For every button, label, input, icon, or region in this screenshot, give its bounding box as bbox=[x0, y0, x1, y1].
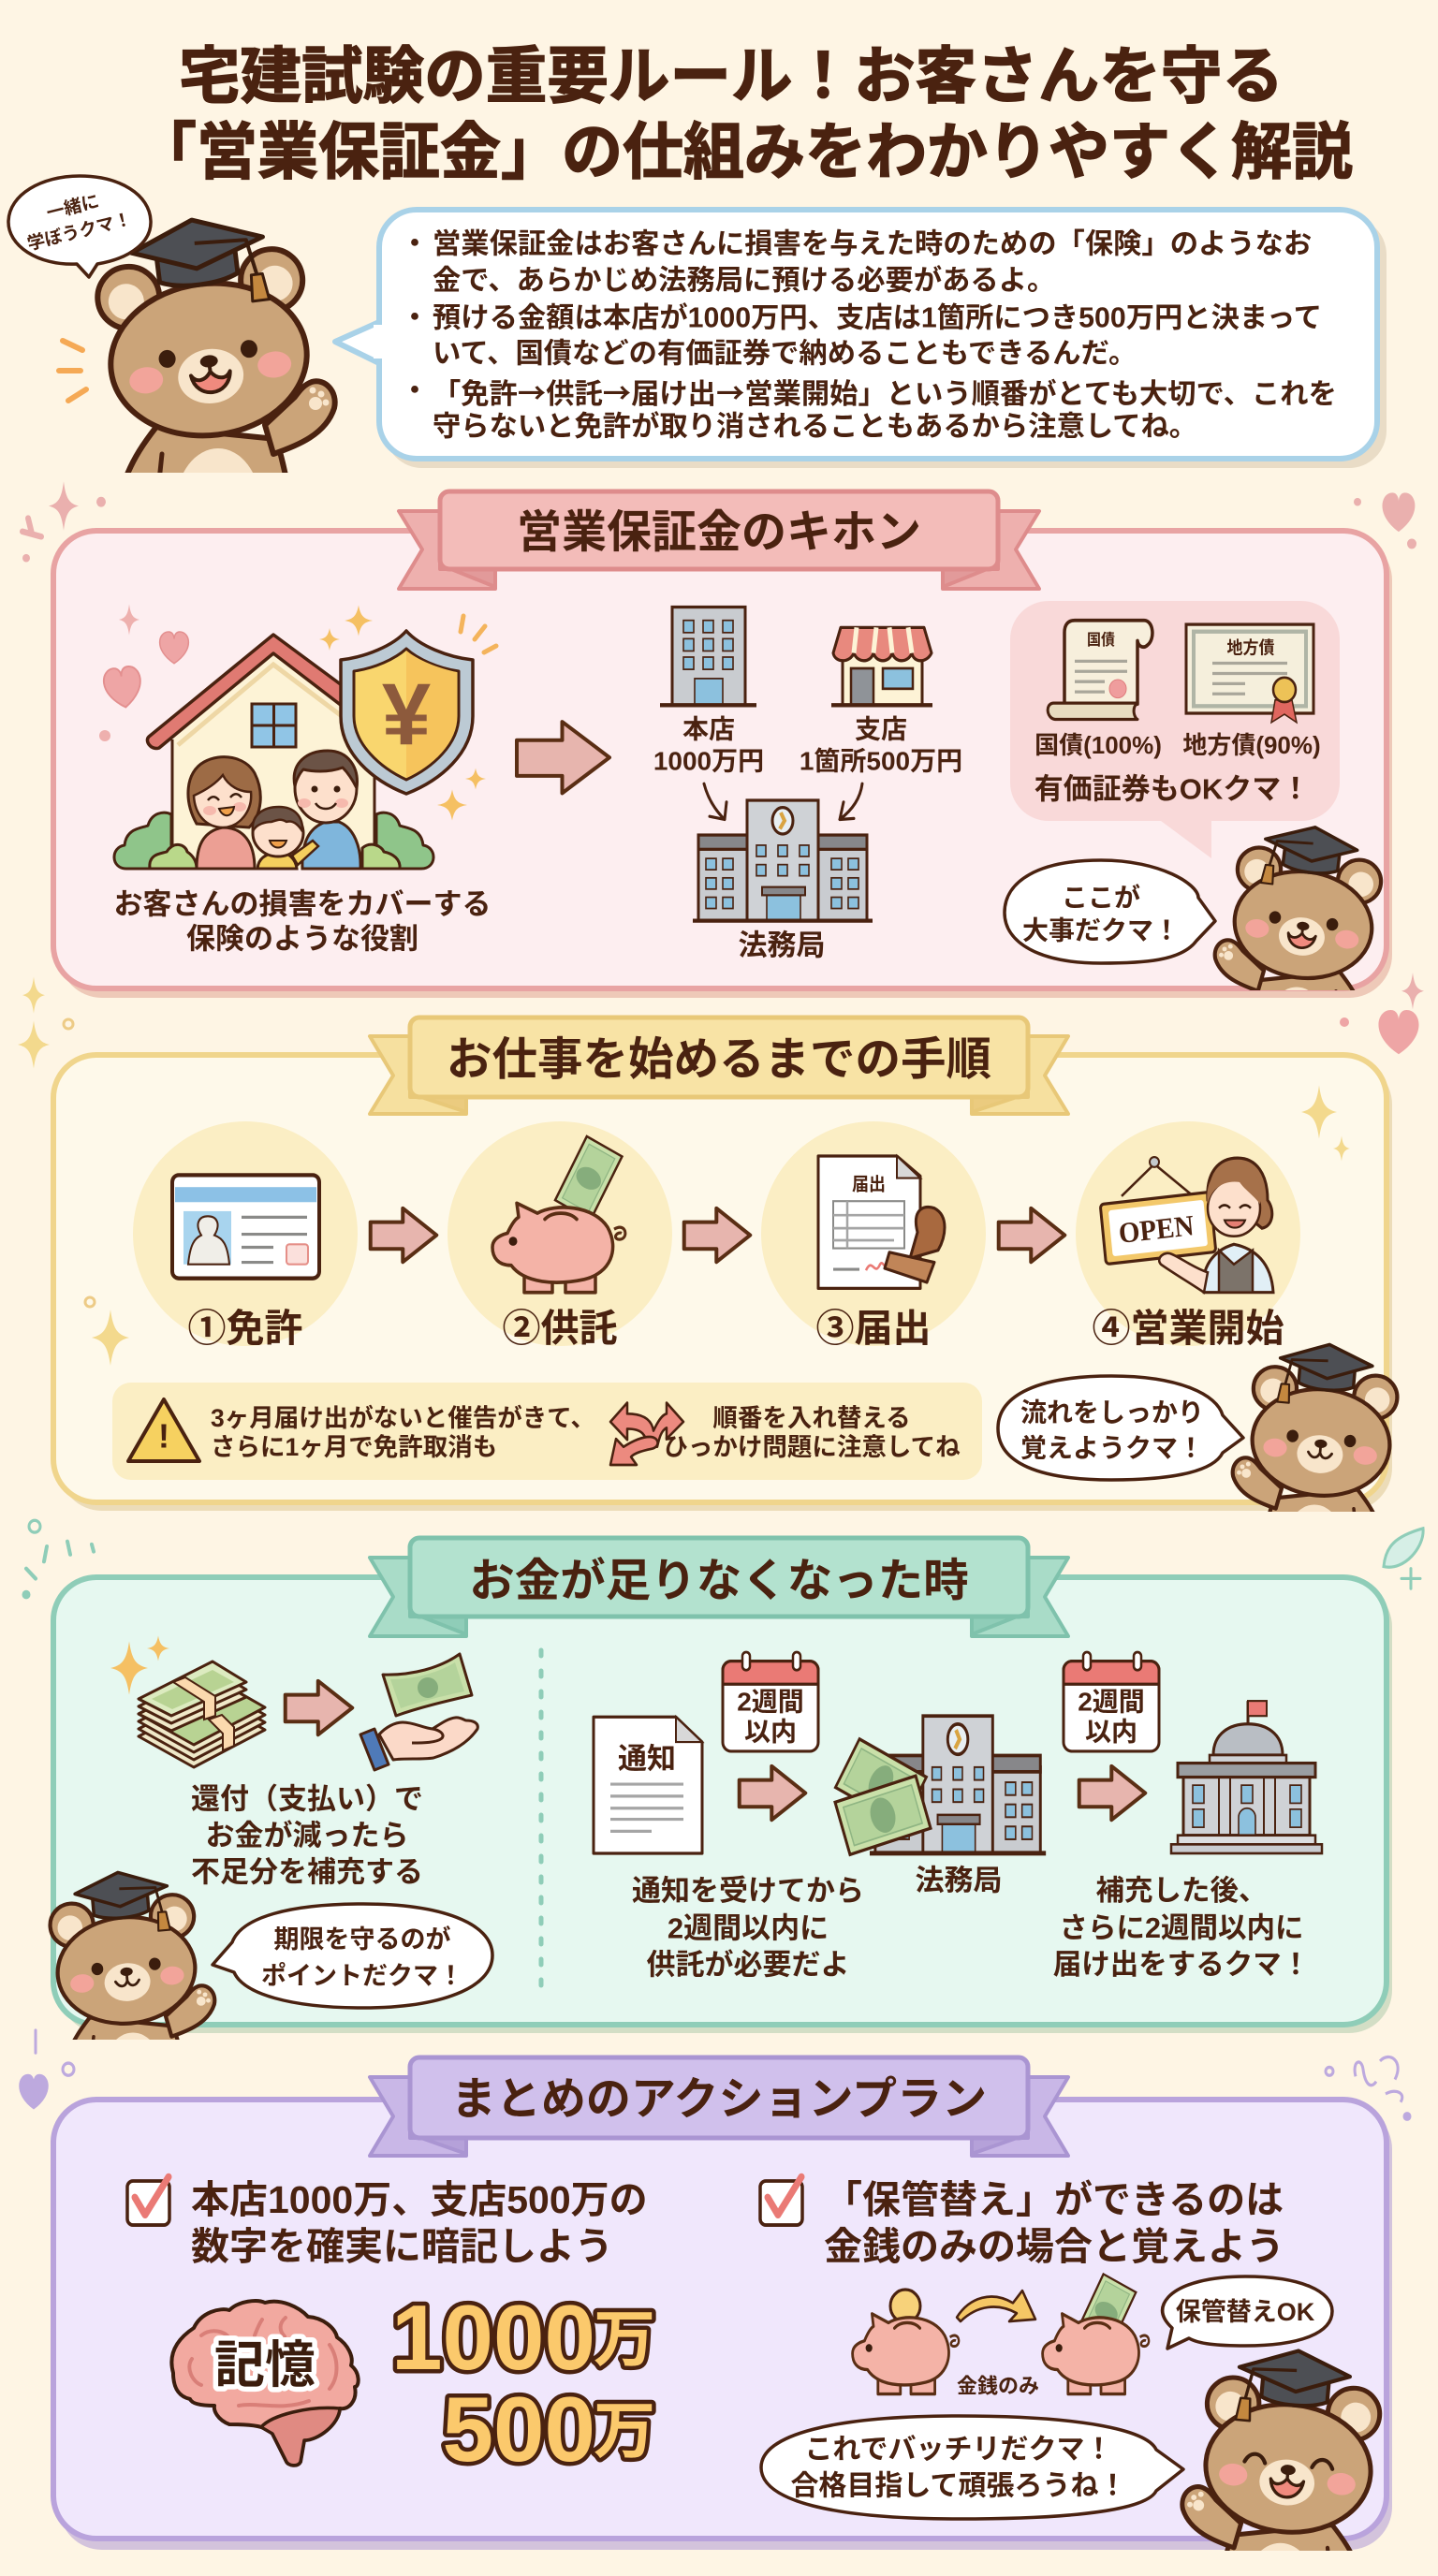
speech bubble: 合格目指して: これでバッチリだクマ！ bbox=[804, 2434, 1113, 2466]
step 4: open sign and clerk icon: OPEN bbox=[1117, 1208, 1196, 1250]
big amounts: 万 bbox=[594, 2305, 655, 2374]
icon: brain with 記憶: 記憶 bbox=[214, 2337, 315, 2393]
big amounts bbox=[391, 2286, 655, 2481]
ribbon heading bbox=[370, 2057, 1068, 2156]
speech bubble: 期限を守る: ポイントだクマ！ bbox=[261, 1962, 463, 1990]
warning bar bbox=[112, 1383, 982, 1480]
speech bubble: 流れをしっかり: 流れをしっかり bbox=[1020, 1398, 1204, 1427]
bullet list: 「免許→供託→届け出→営業開始」という順番がとても大切で、これを bbox=[433, 371, 1337, 412]
ribbon heading bbox=[370, 1017, 1068, 1114]
icon: father bbox=[294, 751, 360, 869]
step 2: piggy bank icon bbox=[492, 1136, 625, 1293]
caption: 補充: 補充した後、 bbox=[1095, 1875, 1268, 1907]
icon: bureau with money bbox=[835, 1716, 1046, 1854]
callout: securities OK: 有価証券もOKクマ！ bbox=[1034, 773, 1310, 805]
arrow bbox=[286, 1681, 352, 1734]
speech bubble: 流れをしっかり: 覚えようクマ！ bbox=[1020, 1434, 1204, 1462]
icon: calendar two weeks: 2週間 bbox=[1078, 1687, 1145, 1717]
arrow bbox=[740, 1766, 805, 1820]
labels: 本店 / 支店 amounts: 本店 bbox=[682, 715, 735, 743]
icon: brain with 記憶 bbox=[171, 2301, 359, 2466]
callout: securities OK: 国債(100%) bbox=[1034, 731, 1162, 759]
mascot bear bbox=[1180, 2349, 1382, 2551]
speech bubble: 合格目指して bbox=[761, 2416, 1183, 2519]
bullet list: 金で、あらかじめ法務局に預ける必要があるよ。 bbox=[433, 264, 1055, 296]
warning bar: ひっかけ問題に注意してね bbox=[663, 1433, 961, 1461]
illustration: savings transfer: 金銭のみ bbox=[957, 2374, 1039, 2398]
labels: 本店 / 支店 amounts bbox=[653, 715, 962, 775]
caption: 還付: お金が減ったら bbox=[206, 1820, 408, 1852]
panel: 営業保証金のキホン bbox=[51, 489, 1392, 998]
panel: お金が足りなくなった時 bbox=[48, 1535, 1392, 2040]
speech bubble: 一緒に学ぼうクマ bbox=[8, 176, 151, 277]
speech bubble: 流れをしっかり bbox=[998, 1376, 1243, 1480]
icon: yen shield: ¥ bbox=[382, 665, 431, 764]
icon: warning triangle bbox=[128, 1399, 199, 1461]
mascot bear bbox=[1230, 1342, 1400, 1512]
action item 1 bbox=[127, 2177, 648, 2268]
speech bubble: 期限を守る bbox=[213, 1904, 492, 2008]
step circles bbox=[133, 1121, 1300, 1346]
icon: notice document: 通知 bbox=[618, 1743, 676, 1775]
decorations: around panel 1 bbox=[22, 481, 1424, 1014]
arrow bbox=[517, 722, 609, 793]
caption: 還付: 還付（支払い）で bbox=[191, 1782, 423, 1816]
icon: child bbox=[253, 807, 318, 869]
caption: 補充: 届け出をするクマ！ bbox=[1053, 1949, 1310, 1981]
ribbon heading bbox=[399, 491, 1039, 589]
caption: 損害カバー bbox=[114, 887, 491, 955]
intro explanation bubble bbox=[335, 210, 1387, 468]
ribbon heading: お金が足りなくなった時 bbox=[469, 1556, 969, 1606]
icon: bill and receiving hand bbox=[360, 1654, 477, 1770]
step labels: ③届出 bbox=[816, 1307, 931, 1350]
icon: legal affairs bureau bbox=[693, 800, 873, 921]
speech bubble: 一緒に学ぼうクマ: 学ぼうクマ！ bbox=[25, 208, 134, 255]
icon: government bond scroll: 国債 bbox=[1087, 632, 1115, 649]
action item 2: 「保管替え」ができるのは bbox=[824, 2178, 1284, 2221]
icon: check box bbox=[127, 2177, 169, 2225]
label: 法務局: 法務局 bbox=[738, 929, 826, 962]
icon: local bond certificate: 地方債 bbox=[1227, 637, 1275, 658]
bullet list: ・ bbox=[401, 228, 429, 260]
title: 宅建試験の重要ルール！お客さんを守る bbox=[179, 41, 1284, 110]
speech bubble: 保管替えOK: 保管替えOK bbox=[1176, 2298, 1315, 2326]
speech bubble: 保管替えOK bbox=[1163, 2276, 1332, 2349]
icon: mother bbox=[188, 757, 260, 869]
labels: 本店 / 支店 amounts: 1箇所500万円 bbox=[800, 747, 962, 775]
mascot bear bbox=[48, 1870, 217, 2040]
caption: 補充: さらに2週間以内に bbox=[1060, 1912, 1303, 1944]
illustration: house, family and shield bbox=[99, 605, 496, 869]
caption: 損害カバー: 保険のような役割 bbox=[186, 923, 418, 955]
step 1: license card icon bbox=[172, 1175, 319, 1279]
mascot bear: intro bbox=[56, 217, 338, 473]
icon: local bond certificate bbox=[1186, 624, 1313, 723]
action item 2: 金銭のみの場合と覚えよう bbox=[824, 2225, 1284, 2268]
step labels: ②供託 bbox=[502, 1307, 618, 1350]
ribbon heading: まとめのアクションプラン bbox=[451, 2074, 987, 2125]
speech bubble: ここが大事だクマ: ここが bbox=[1062, 882, 1140, 912]
bullet list: ・ bbox=[401, 376, 429, 406]
arrows to 法務局 bbox=[704, 783, 862, 819]
action item 1: 本店1000万、支店500万の bbox=[191, 2178, 648, 2221]
step labels: ④営業開始 bbox=[1092, 1307, 1284, 1350]
speech bubble: ここが大事だクマ: 大事だクマ！ bbox=[1022, 915, 1180, 945]
caption: 還付 bbox=[191, 1782, 423, 1889]
bullet list: 預ける金額は本店が1000万円、支店は1箇所につき500万円と決まって bbox=[433, 301, 1322, 333]
icon: yen shield bbox=[341, 631, 473, 794]
warning bar: 順番を入れ替える bbox=[712, 1404, 911, 1432]
icon: head office building bbox=[660, 607, 756, 705]
step 3: filing document icon bbox=[818, 1156, 945, 1288]
icon: swap arrows bbox=[610, 1403, 683, 1465]
label: 法務局: 法務局 bbox=[916, 1865, 1002, 1896]
speech bubble: ここが大事だクマ bbox=[1005, 860, 1215, 963]
icon: government building bbox=[1171, 1701, 1322, 1853]
warning bar: 3ヶ月届け出がないと催告がきて、 bbox=[211, 1404, 595, 1432]
decorations: around panel 2 bbox=[18, 1010, 1419, 1069]
callout: securities OK: 地方債(90%) bbox=[1182, 731, 1321, 759]
speech bubble: 合格目指して: 合格目指して頑張ろうね！ bbox=[790, 2471, 1127, 2501]
decorations: around panel 3 bbox=[22, 1520, 1423, 1599]
warning bar: さらに1ヶ月で免許取消も bbox=[211, 1433, 497, 1461]
icon: notice document bbox=[594, 1717, 702, 1853]
caption: 通知 bbox=[632, 1874, 864, 1981]
caption: 通知: 2週間以内に bbox=[668, 1911, 829, 1945]
bullet list: ・ bbox=[401, 303, 429, 333]
ribbon heading: お仕事を始めるまでの手順 bbox=[447, 1034, 991, 1085]
step 3: filing document icon: 届出 bbox=[852, 1174, 886, 1194]
icon: calendar two weeks: 以内 bbox=[1085, 1717, 1137, 1747]
action item 1: 数字を確実に暗記しよう bbox=[191, 2225, 613, 2268]
ribbon heading bbox=[370, 1538, 1068, 1636]
labels: 本店 / 支店 amounts: 支店 bbox=[855, 715, 907, 743]
icon: check box bbox=[760, 2177, 802, 2225]
ribbon heading: 営業保証金のキホン bbox=[517, 507, 921, 558]
caption: 還付: 不足分を補充する bbox=[191, 1855, 423, 1889]
step labels bbox=[187, 1307, 1284, 1350]
caption: 補充 bbox=[1053, 1875, 1310, 1981]
icon: warning triangle: ! bbox=[158, 1417, 169, 1455]
illustration: savings transfer bbox=[853, 2274, 1149, 2398]
big amounts: 500 bbox=[442, 2378, 595, 2481]
action item 2 bbox=[760, 2177, 1284, 2268]
caption: 損害カバー: お客さんの損害をカバーする bbox=[114, 887, 491, 921]
icon: calendar two weeks: 以内 bbox=[744, 1717, 797, 1747]
icon: money stack bbox=[110, 1636, 265, 1767]
icon: calendar two weeks bbox=[723, 1652, 818, 1751]
icon: branch store bbox=[831, 627, 932, 705]
speech bubble: 一緒に学ぼうクマ: 一緒に bbox=[45, 191, 101, 224]
icon: calendar two weeks bbox=[1064, 1652, 1159, 1751]
labels: 本店 / 支店 amounts: 1000万円 bbox=[653, 747, 764, 775]
big amounts: 1000 bbox=[391, 2286, 595, 2389]
bullet list: 守らないと免許が取り消されることもあるから注意してね。 bbox=[433, 410, 1197, 442]
big amounts: 万 bbox=[594, 2396, 655, 2466]
speech bubble: 期限を守る: 期限を守るのが bbox=[273, 1925, 451, 1954]
mascot bear bbox=[1213, 826, 1384, 990]
icon: government bond scroll bbox=[1048, 621, 1152, 720]
step arrows bbox=[371, 1208, 1064, 1262]
icon: calendar two weeks: 2週間 bbox=[737, 1687, 804, 1717]
title bbox=[136, 41, 1353, 186]
bullet list: 営業保証金はお客さんに損害を与えた時のための「保険」のようなお bbox=[433, 228, 1312, 260]
step 4: open sign and clerk icon bbox=[1100, 1157, 1273, 1293]
panel: まとめのアクションプラン bbox=[53, 2057, 1392, 2576]
bullet list: いて、国債などの有価証券で納めることもできるんだ。 bbox=[433, 337, 1137, 369]
callout: securities OK bbox=[1010, 601, 1340, 858]
caption: 通知: 通知を受けてから bbox=[632, 1874, 864, 1908]
caption: 通知: 供託が必要だよ bbox=[646, 1949, 850, 1981]
decorations: around panel 4 bbox=[20, 2030, 1411, 2120]
panel: お仕事を始めるまでの手順 bbox=[51, 1015, 1400, 1512]
arrow bbox=[1079, 1766, 1145, 1820]
step labels: ①免許 bbox=[187, 1307, 303, 1350]
bullet list bbox=[401, 228, 1337, 442]
title: 「営業保証金」の仕組みをわかりやすく解説 bbox=[136, 117, 1353, 186]
